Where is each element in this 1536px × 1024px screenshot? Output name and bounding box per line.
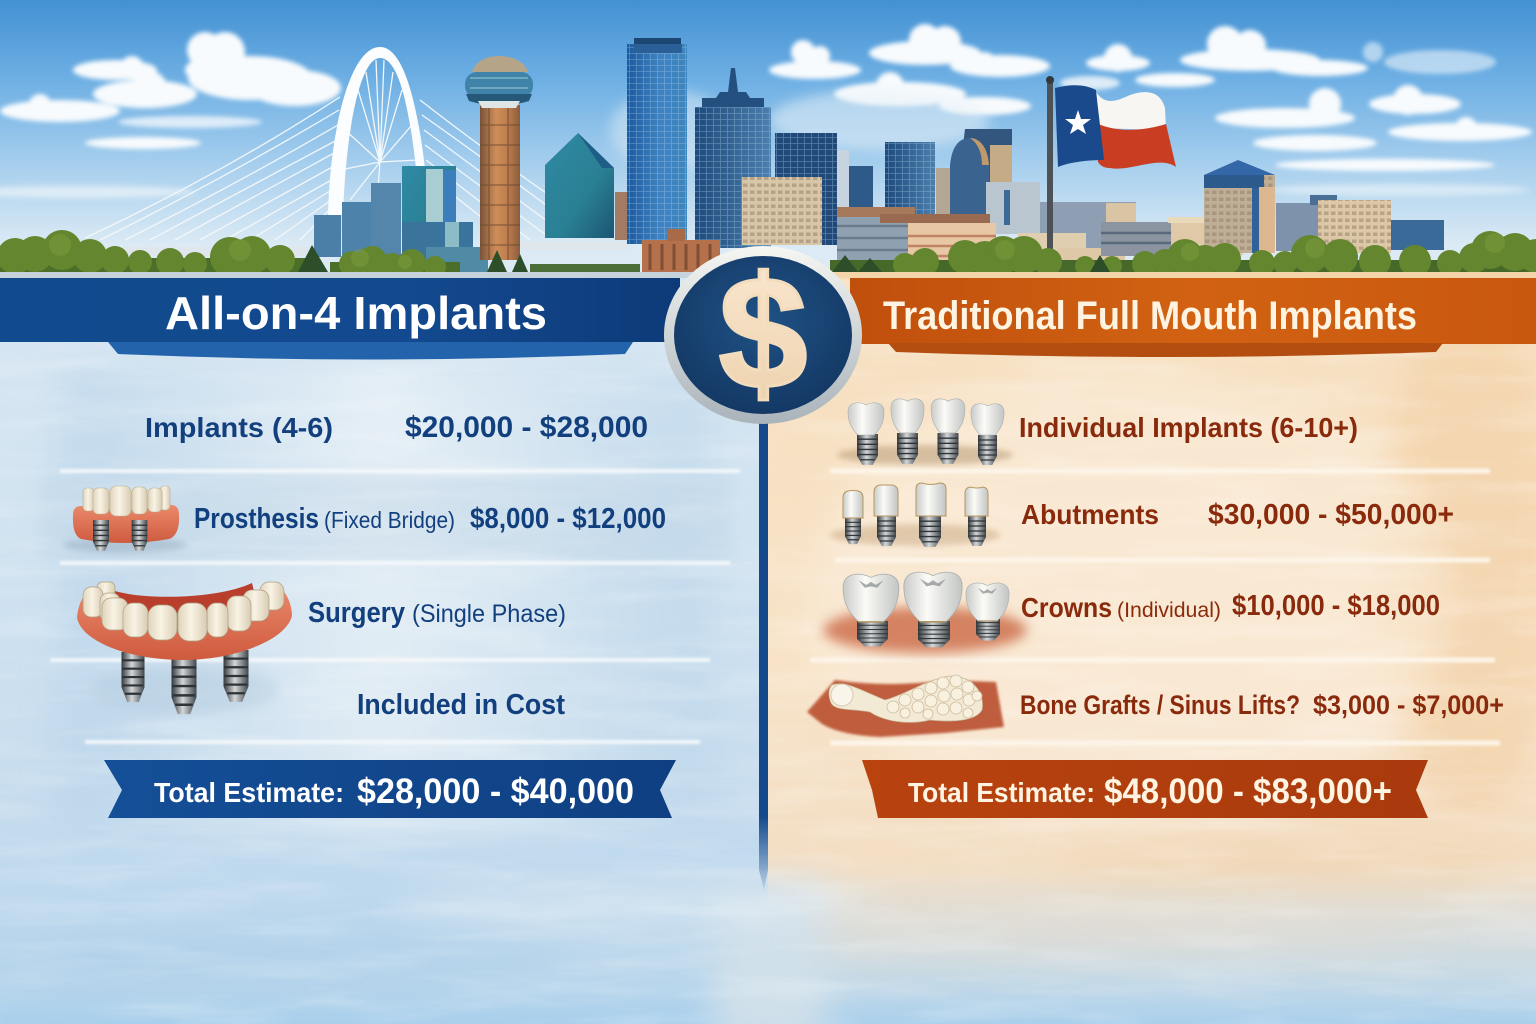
icon: reunion tower [465,56,533,260]
icon: crowns [823,572,1027,653]
row: bone grafts: $3,000 - $7,000+ [1313,690,1504,720]
center divider [759,400,768,890]
icon: prosthesis bridge [63,486,187,553]
row: prosthesis [194,503,666,535]
icon: individual implants [837,399,1013,465]
icon: left towers [314,166,488,273]
bottom cloud blend [0,280,1536,1024]
row dividers [50,471,740,742]
clouds [0,24,1532,171]
icon: central towers [545,38,1444,273]
banner: traditional total: Total Estimate: [908,777,1095,808]
row: crowns [1021,590,1440,623]
row: implants: Implants (4-6) [145,412,333,443]
row: included: Included in Cost [357,689,565,721]
icon: central dollar coin: $ [719,243,807,422]
row: abutments: $30,000 - $50,000+ [1208,499,1454,531]
ribbon under heading [888,343,1443,357]
row: prosthesis: Prosthesis [194,503,319,535]
banner: all-on-4 total: $28,000 - $40,000 [357,772,634,811]
tree line [0,230,1536,278]
row: surgery: Surgery [308,597,405,629]
icon: abutments [830,483,1000,547]
row: crowns: Crowns [1021,592,1112,623]
icon: full arch denture [77,582,292,714]
row: bone grafts: Bone Grafts / Sinus Lifts? [1020,690,1300,720]
heading: traditional: Traditional Full Mouth Implants [883,294,1417,338]
row: implants [145,411,648,444]
row: abutments: Abutments [1021,499,1159,530]
row: abutments [1021,499,1454,531]
row: prosthesis: $8,000 - $12,000 [470,503,666,535]
banner: traditional total [862,760,1428,818]
header: traditional [850,278,1536,357]
row: implants: $20,000 - $28,000 [405,411,648,444]
banner: all-on-4 total [104,760,676,818]
icon: texas flag [1046,76,1176,257]
panel: all-on-4 background [0,270,768,1024]
row: crowns: (Individual) [1117,599,1221,622]
ribbon under heading [108,342,633,360]
panel: traditional rows [1019,412,1504,720]
icon: central dollar coin [664,243,862,424]
row: bone grafts [1020,690,1504,720]
panel: traditional background [768,270,1536,1024]
icon: arch [328,47,425,215]
icon: bridge arch and cables [85,60,630,256]
heading: all-on-4: All-on-4 Implants [165,287,547,339]
row: individual implants: Individual Implants (6-10+) [1019,412,1358,443]
row: surgery: (Single Phase) [412,600,566,628]
row: crowns: $10,000 - $18,000 [1232,590,1440,622]
header: all-on-4 [0,278,680,360]
row: prosthesis: (Fixed Bridge) [324,507,455,533]
icon: bone graft [807,675,1004,737]
panel: skyline header [0,0,1536,278]
banner: all-on-4 total: Total Estimate: [154,777,344,808]
panel: all-on-4 rows [145,411,666,721]
row: surgery [308,597,566,629]
banner: traditional total: $48,000 - $83,000+ [1104,772,1392,811]
